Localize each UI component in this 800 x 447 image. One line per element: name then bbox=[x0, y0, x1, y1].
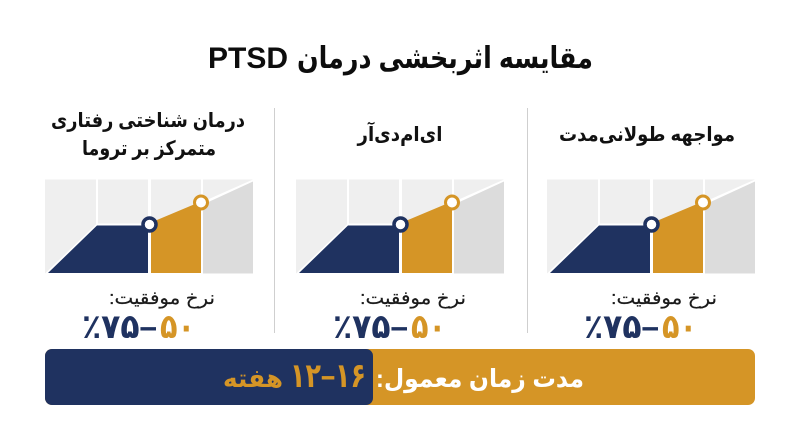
success rate value: ۵۰ bbox=[411, 308, 446, 346]
heading: trauma-focused CBT: متمرکز بر تروما bbox=[82, 138, 216, 160]
heading: prolonged exposure: مواجهه طولانی‌مدت bbox=[559, 124, 735, 146]
heading: trauma-focused CBT: درمان شناختی رفتاری bbox=[51, 110, 245, 132]
title: مقایسه اثربخشی درمان bbox=[297, 42, 593, 75]
duration value bbox=[223, 357, 366, 395]
success rate label: نرخ موفقیت: bbox=[611, 288, 717, 309]
chart: success curve bbox=[547, 180, 755, 274]
divider bbox=[274, 108, 276, 333]
panel: EMDR bbox=[296, 121, 504, 346]
success rate value: ۵۰ bbox=[662, 308, 697, 346]
chart: success curve bbox=[296, 180, 504, 274]
success rate label: نرخ موفقیت: bbox=[360, 288, 466, 309]
panel: prolonged exposure bbox=[547, 124, 755, 346]
success rate value: ۵۰ bbox=[160, 308, 195, 346]
duration value: ۱۲–۱۶ bbox=[290, 357, 366, 395]
success rate value: ٪۷۵– bbox=[584, 308, 659, 346]
chart: success curve bbox=[45, 180, 253, 274]
duration bar bbox=[45, 349, 755, 405]
duration value: هفته bbox=[223, 365, 283, 393]
heading: trauma-focused CBT bbox=[51, 110, 245, 160]
title bbox=[208, 42, 593, 75]
divider bbox=[526, 108, 528, 333]
success rate label: نرخ موفقیت: bbox=[109, 288, 215, 309]
success rate value: ٪۷۵– bbox=[82, 308, 157, 346]
heading: EMDR: ای‌ام‌دی‌آر bbox=[357, 121, 442, 146]
panel: cognitive processing therapy bbox=[45, 110, 253, 346]
duration label: مدت زمان معمول: bbox=[376, 365, 584, 394]
success rate value: ٪۷۵– bbox=[333, 308, 408, 346]
title: PTSD bbox=[208, 42, 288, 75]
